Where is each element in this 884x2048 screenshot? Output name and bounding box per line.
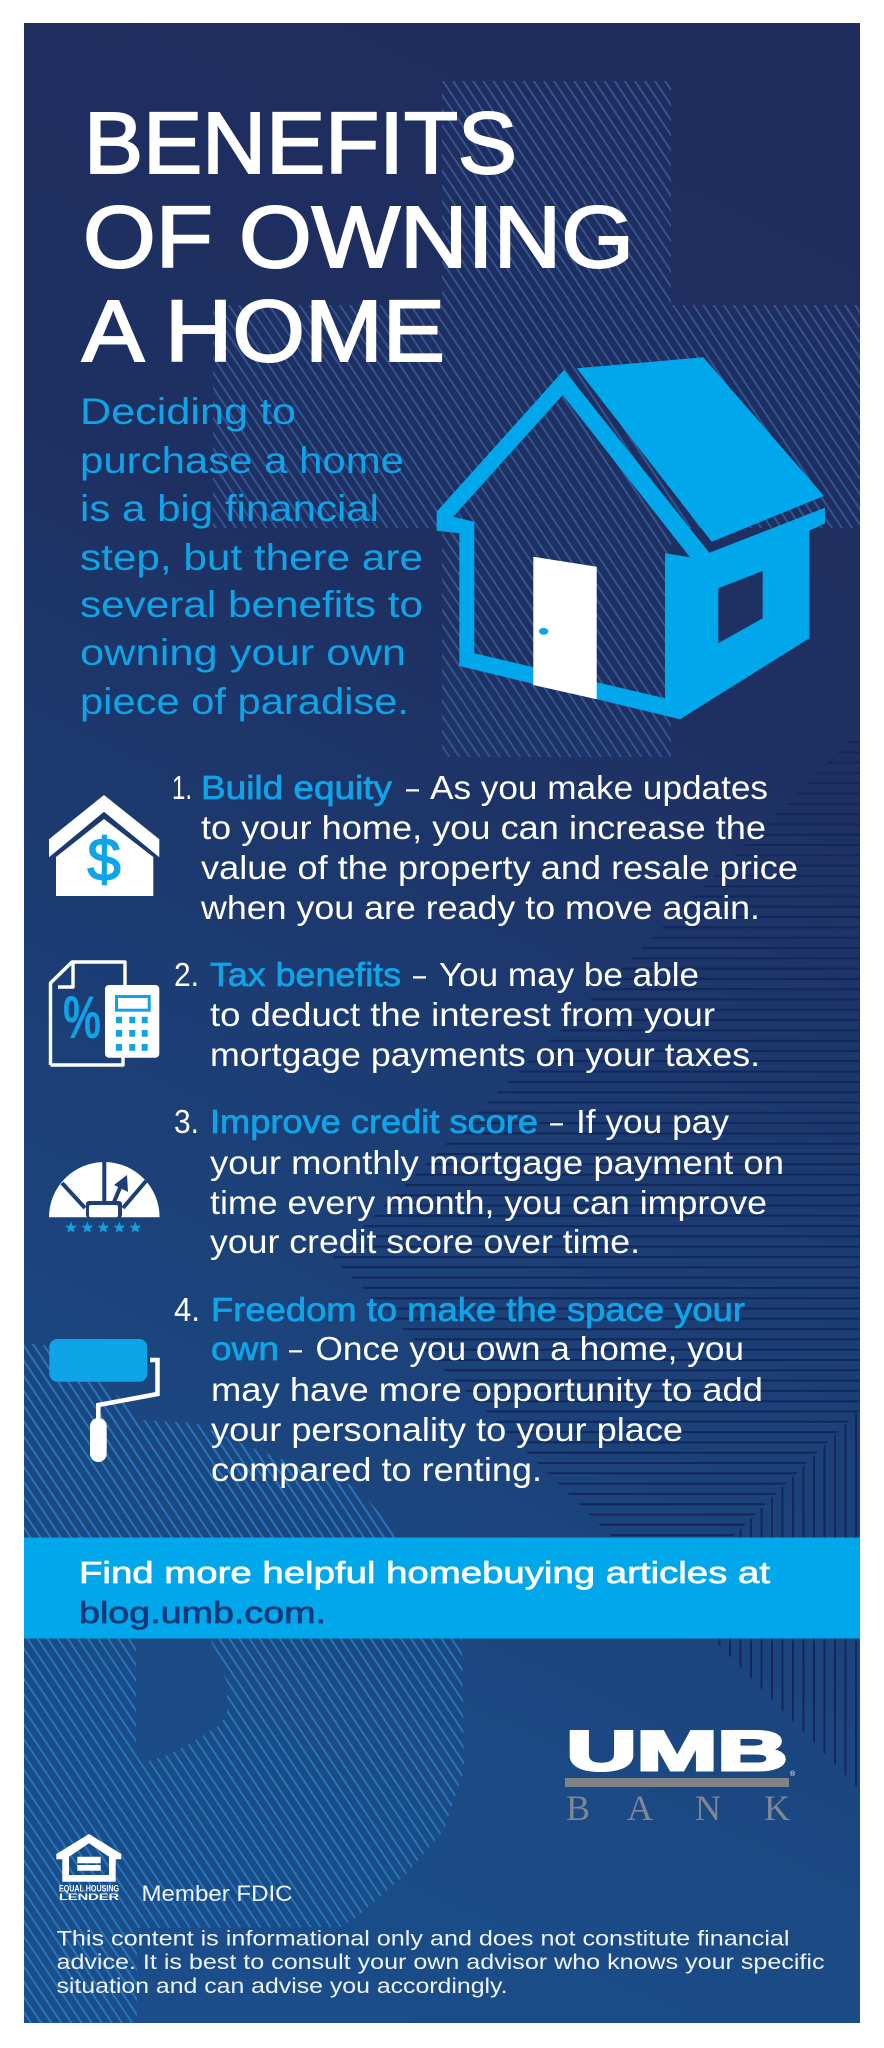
text: build equity: value of the property and resale price xyxy=(201,849,798,886)
intro text: purchase a home xyxy=(80,439,404,481)
icon: document and calculator xyxy=(50,962,159,1065)
text: build equity: 1. xyxy=(172,769,192,806)
disclaimer xyxy=(56,1928,824,1998)
text: improve credit score: your monthly mortgage payment on xyxy=(210,1144,784,1181)
text: improve credit score: your credit score over time. xyxy=(210,1223,640,1260)
title xyxy=(82,95,634,380)
text: tax benefits: to deduct the interest from your xyxy=(210,996,715,1033)
text: improve credit score: Improve credit score xyxy=(210,1103,538,1140)
UMB Bank logo: ® xyxy=(790,1770,796,1778)
text: improve credit score: If you pay xyxy=(576,1103,730,1140)
equal housing lender logo xyxy=(56,1834,121,1903)
text: freedom: own xyxy=(211,1330,279,1367)
text: build equity xyxy=(172,769,798,926)
member FDIC: Member FDIC xyxy=(142,1881,292,1906)
disclaimer: situation and can advise you accordingly. xyxy=(56,1975,508,1998)
UMB Bank logo: BANK xyxy=(566,1788,790,1828)
icon: large house xyxy=(437,357,825,719)
text: tax benefits: 2. xyxy=(174,956,199,993)
equal housing lender logo: LENDER xyxy=(59,1892,119,1903)
call-to-action banner: blog.umb.com. xyxy=(79,1595,326,1630)
house roof xyxy=(577,357,824,542)
title: OF OWNING xyxy=(83,189,634,286)
text: improve credit score: 3. xyxy=(174,1103,199,1140)
intro text xyxy=(80,390,423,722)
text: freedom: your personality to your place xyxy=(211,1411,683,1448)
intro text: Deciding to xyxy=(80,390,296,432)
icon: paint roller xyxy=(49,1339,157,1462)
door knob xyxy=(539,628,548,635)
icon: house with dollar sign xyxy=(49,795,159,896)
text: freedom: Once you own a home, you xyxy=(316,1330,744,1367)
equal housing lender logo: EQUAL HOUSING xyxy=(59,1884,119,1894)
title: A HOME xyxy=(82,283,445,380)
text: freedom: Freedom to make the space your xyxy=(211,1291,745,1328)
text: freedom xyxy=(174,1291,763,1488)
disclaimer: This content is informational only and does not constitute financial xyxy=(56,1928,790,1950)
text: freedom: compared to renting. xyxy=(211,1451,542,1488)
UMB Bank logo: UMB xyxy=(566,1719,788,1782)
text: tax benefits: You may be able xyxy=(439,956,699,993)
text: improve credit score xyxy=(174,1103,784,1260)
text: freedom: may have more opportunity to add xyxy=(211,1371,763,1408)
text: build equity: As you make updates xyxy=(430,769,768,806)
text: improve credit score: – xyxy=(550,1103,563,1140)
house walls xyxy=(437,370,825,719)
text: build equity: to your home, you can increase the xyxy=(201,809,766,846)
text: build equity: when you are ready to move again. xyxy=(200,889,760,926)
intro text: piece of paradise. xyxy=(80,680,409,722)
disclaimer: advice. It is best to consult your own advisor who knows your specific xyxy=(56,1951,824,1974)
intro text: is a big financial xyxy=(80,487,379,529)
text: freedom: – xyxy=(289,1330,302,1367)
benefit 3: improve credit score xyxy=(49,1103,784,1260)
text: build equity: – xyxy=(406,769,419,806)
text: tax benefits xyxy=(174,956,760,1073)
text: tax benefits: Tax benefits xyxy=(210,956,401,993)
text: tax benefits: – xyxy=(413,956,426,993)
text: tax benefits: mortgage payments on your taxes. xyxy=(210,1036,760,1073)
title: BENEFITS xyxy=(84,95,517,192)
call-to-action banner: Find more helpful homebuying articles at xyxy=(79,1555,770,1590)
intro text: several benefits to xyxy=(80,583,423,625)
benefit 4: freedom to make the space your own xyxy=(49,1291,763,1488)
intro text: owning your own xyxy=(80,631,406,673)
house window xyxy=(718,571,763,643)
text: freedom: 4. xyxy=(174,1291,200,1328)
benefit 2: tax benefits xyxy=(50,956,760,1073)
UMB Bank logo xyxy=(565,1719,796,1828)
text: build equity: Build equity xyxy=(201,769,393,806)
intro text: step, but there are xyxy=(80,536,423,578)
house door xyxy=(533,557,597,699)
call-to-action banner xyxy=(24,1538,860,1638)
icon: credit gauge xyxy=(49,1162,160,1233)
icon: document and calculator: % xyxy=(63,984,101,1051)
text: improve credit score: time every month, you can improve xyxy=(210,1184,767,1221)
icon: house with dollar sign: $ xyxy=(87,826,121,893)
benefit 1: build equity xyxy=(49,769,798,926)
